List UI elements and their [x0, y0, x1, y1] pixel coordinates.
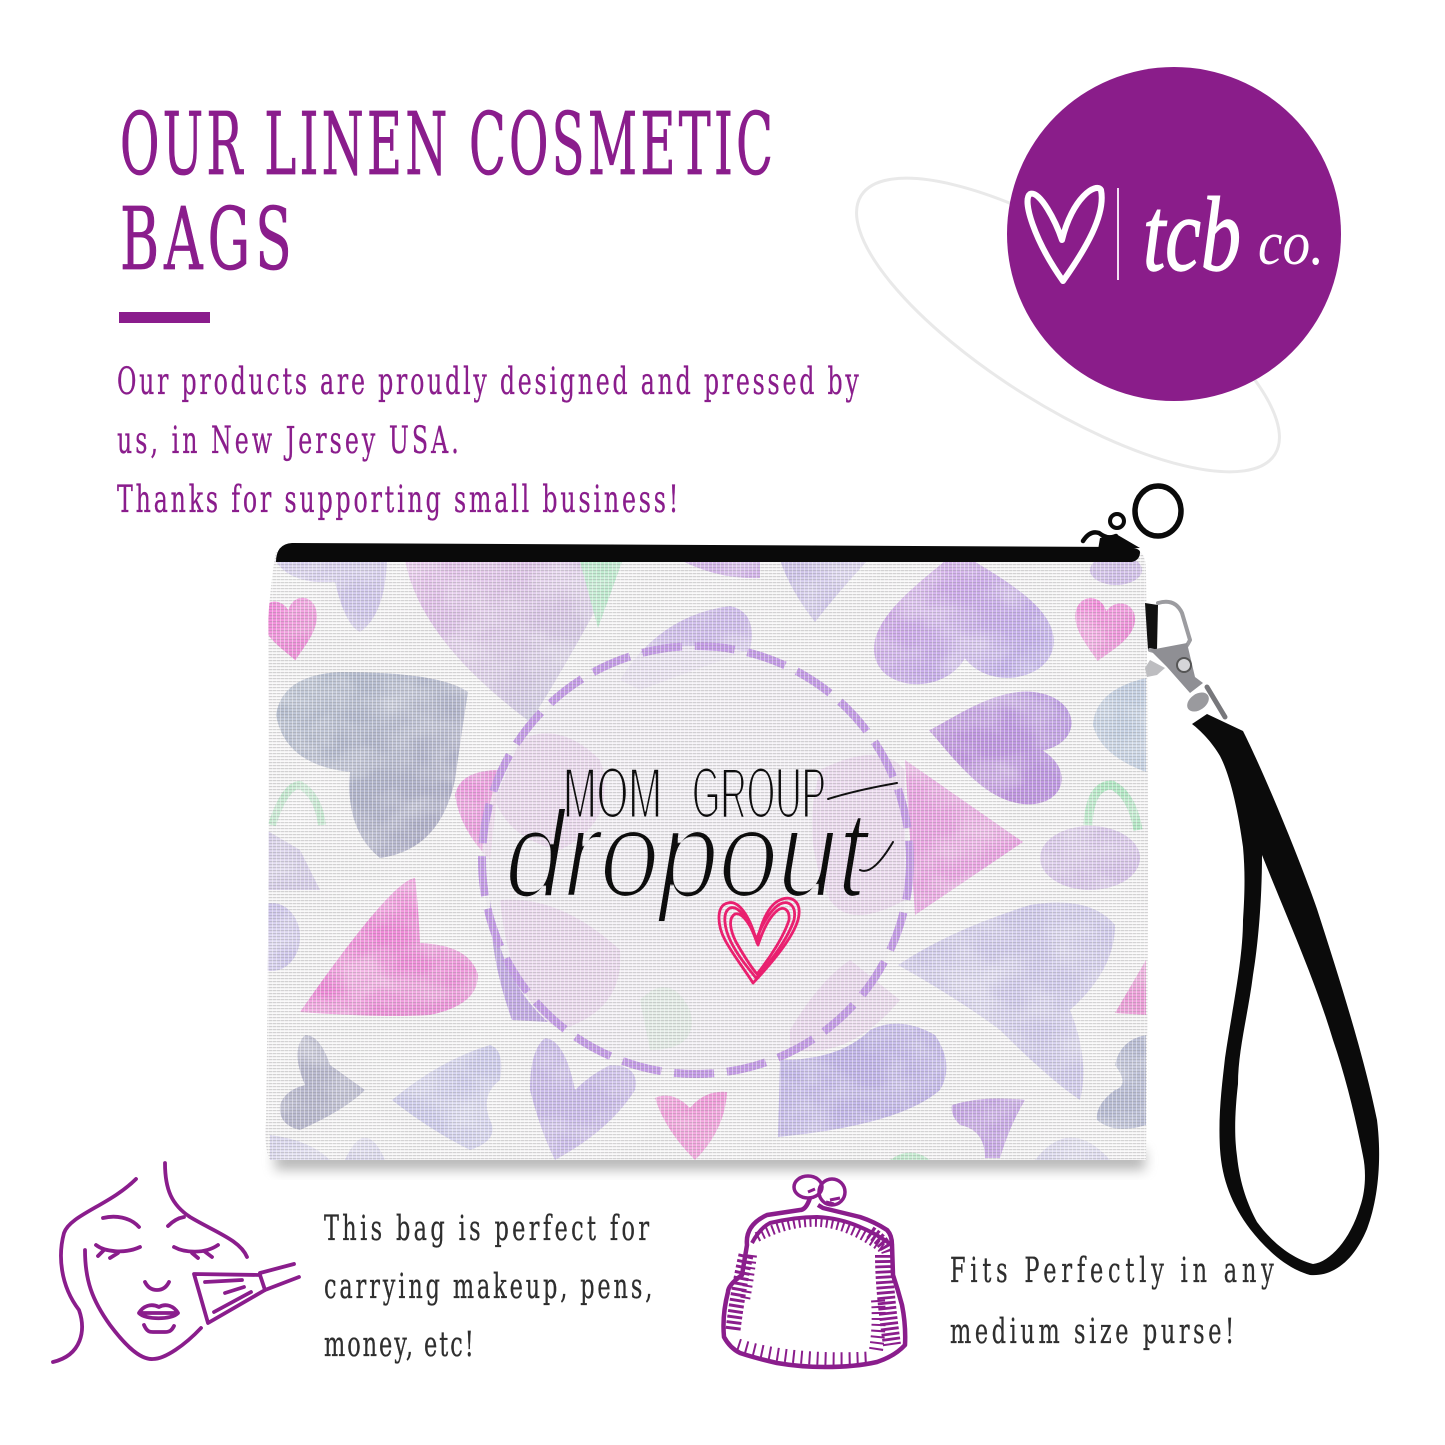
linen texture [264, 552, 1150, 1162]
title: OUR LINEN COSMETIC [120, 95, 773, 195]
decorative ellipse behind logo [818, 126, 1318, 524]
zipper [276, 543, 1140, 562]
logo badge [1007, 67, 1341, 401]
bag slogan: MOM GROUP: MOM [563, 754, 662, 834]
text: purse fit: medium size purse! [950, 1311, 1234, 1351]
text: purse fit: Fits Perfectly in any [950, 1250, 1274, 1290]
icon: pink scribble heart [719, 898, 799, 983]
intro paragraph: Thanks for supporting small business! [117, 479, 678, 522]
icon: logo heart [1028, 188, 1102, 281]
intro paragraph [117, 361, 859, 522]
bag print: watercolor hearts [244, 544, 1150, 1162]
zipper pull and key ring [1083, 486, 1181, 550]
title underline [119, 312, 210, 323]
bag slogan: MOM GROUP: GROUP [692, 754, 826, 834]
logo wordmark: co.: co. [1258, 210, 1324, 278]
text: bag uses: money, etc! [324, 1324, 474, 1364]
swivel clasp [1145, 602, 1225, 717]
text: bag uses [324, 1208, 652, 1364]
intro paragraph: Our products are proudly designed and pressed by [117, 361, 859, 404]
text: bag uses: This bag is perfect for [324, 1208, 650, 1248]
bag slogan: dropout: dropout [505, 786, 871, 924]
text: purse fit [950, 1250, 1274, 1351]
bag slogan: MOM GROUP [563, 754, 826, 834]
logo divider [1117, 188, 1119, 280]
text: bag uses: carrying makeup, pens, [324, 1266, 652, 1306]
cosmetic bag [244, 543, 1150, 1162]
title [120, 95, 773, 289]
bag shadow [275, 1150, 1145, 1170]
bag print: dashed circle [482, 646, 910, 1074]
bag slogan flourish [828, 783, 897, 871]
icon: face with makeup brush [53, 1163, 299, 1362]
intro paragraph: us, in New Jersey USA. [117, 420, 459, 463]
logo wordmark: tcb: tcb [1143, 176, 1241, 293]
icon: clasp purse [724, 1176, 905, 1367]
wrist strap [1192, 714, 1379, 1275]
title: BAGS [120, 190, 292, 289]
